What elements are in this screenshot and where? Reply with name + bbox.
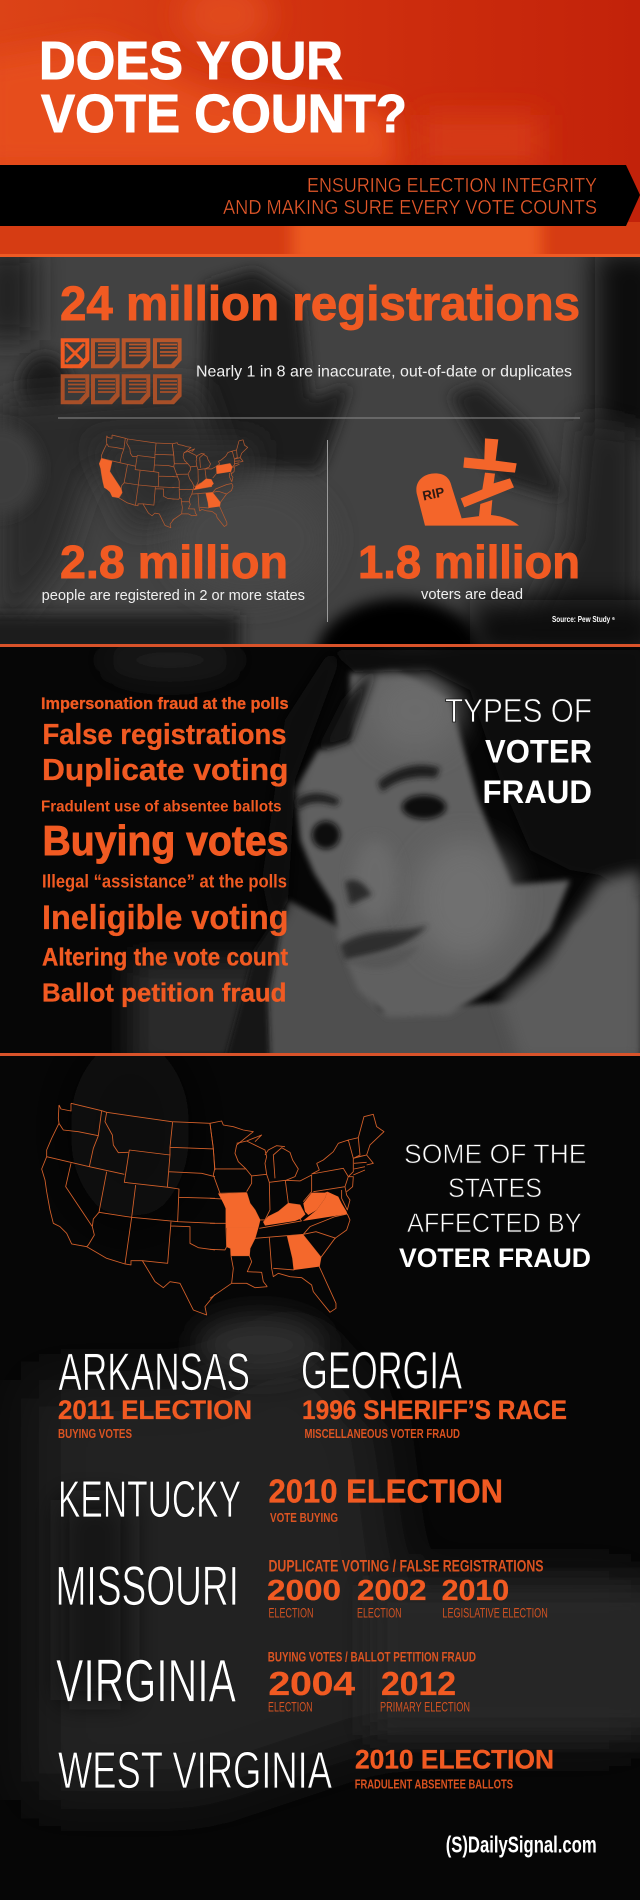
state: West Virginia: FRADULENT ABSENTEE BALLOTS (355, 1778, 513, 1792)
map: affected states (42, 1103, 384, 1315)
heading: some of the states: STATES (448, 1173, 542, 1203)
text: nearly 1 in 8: Nearly 1 in 8 are inaccurate, out-of-date or duplicates (196, 364, 572, 380)
list: types of fraud: False registrations (42, 719, 286, 751)
heading: types of voter fraud (445, 692, 592, 810)
list: types of fraud: Impersonation fraud at the polls (41, 694, 288, 713)
state: Virginia: ELECTION (268, 1698, 313, 1714)
state: Kentucky (58, 1471, 503, 1529)
list: types of fraud: Duplicate voting (42, 752, 288, 787)
state: Georgia (301, 1342, 567, 1441)
icon: ballot documents grid (61, 338, 182, 404)
state: Arkansas (58, 1343, 252, 1441)
list: types of fraud: Illegal “assistance” at the polls (42, 872, 287, 892)
state: Missouri: MISSOURI (56, 1554, 239, 1617)
state: West Virginia: WEST VIRGINIA (58, 1742, 332, 1800)
photo: young woman's face (94, 647, 640, 1053)
stat: 2.8 million: 2.8 million (60, 536, 288, 588)
state: Missouri: 2002 (357, 1575, 426, 1607)
list: types of fraud: Fradulent use of absentee ballots (41, 799, 282, 816)
panel: registration statistics (0, 257, 640, 644)
state: West Virginia: 2010 ELECTION (355, 1745, 554, 1775)
state: Arkansas: 2011 ELECTION (58, 1395, 252, 1425)
list: types of fraud (41, 694, 289, 1008)
heading: 24 million registrations: 24 million registrations (60, 278, 580, 331)
state: Kentucky: KENTUCKY (58, 1471, 241, 1529)
heading: types of voter fraud: VOTER (485, 734, 592, 770)
state: Virginia (56, 1647, 476, 1714)
state: Kentucky: VOTE BUYING (270, 1511, 338, 1525)
map: states with duplicate registrations (99, 435, 248, 528)
list: types of fraud: Buying votes (42, 817, 288, 864)
background: dark blurred photo (0, 1040, 640, 1900)
heading: some of the states: VOTER FRAUD (399, 1243, 591, 1273)
stat: 2.8 million: people are registered in 2 or more states (42, 587, 305, 604)
state: Missouri: DUPLICATE VOTING / FALSE REGISTRATIONS (268, 1556, 544, 1575)
heading: types of voter fraud: TYPES OF (445, 692, 592, 729)
subtitle banner arrow (0, 165, 640, 226)
state: Missouri: LEGISLATIVE ELECTION (442, 1604, 548, 1620)
subtitle banner arrow: ENSURING ELECTION INTEGRITY (307, 175, 597, 197)
stat: 1.8 million: voters are dead (421, 586, 523, 603)
state: Missouri: 2000 (267, 1575, 341, 1607)
state: Virginia: BUYING VOTES / BALLOT PETITION FRAUD (268, 1648, 476, 1664)
stat: 1.8 million: 1.8 million (358, 536, 580, 588)
icon: tombstone and broken cross (416, 438, 519, 526)
state: Arkansas: ARKANSAS (58, 1343, 250, 1402)
heading: types of voter fraud: FRAUD (482, 774, 592, 810)
state: Virginia: 2012 (381, 1665, 456, 1702)
state: Virginia: PRIMARY ELECTION (380, 1698, 470, 1714)
background: orange header panel (0, 0, 640, 265)
state: Missouri: ELECTION (357, 1604, 402, 1620)
source note: Source: Pew Study ⁶ (552, 615, 615, 624)
state: Missouri: 2010 (442, 1575, 509, 1607)
list: types of fraud: Ineligible voting (42, 899, 288, 937)
state: Kentucky: 2010 ELECTION (268, 1472, 503, 1510)
heading: some of the states (399, 1139, 591, 1273)
subtitle banner arrow: AND MAKING SURE EVERY VOTE COUNTS (223, 197, 597, 219)
state: Virginia: 2004 (268, 1665, 356, 1702)
state: Georgia: 1996 SHERIFF’S RACE (302, 1395, 567, 1425)
title: DOES YOUR (39, 31, 343, 91)
state: Arkansas: BUYING VOTES (58, 1427, 132, 1441)
icon: tombstone and broken cross: RIP (421, 484, 446, 504)
panel: states affected (0, 1040, 640, 1900)
state: Georgia: MISCELLANEOUS VOTER FRAUD (304, 1427, 460, 1441)
state: Missouri (56, 1554, 548, 1620)
list: types of fraud: Ballot petition fraud (42, 978, 286, 1008)
title: VOTE COUNT? (41, 84, 407, 144)
state: Virginia: VIRGINIA (56, 1647, 236, 1714)
panel: types of voter fraud (42, 647, 640, 1053)
list: types of fraud: Altering the vote count (42, 944, 289, 972)
state: Georgia: GEORGIA (301, 1342, 462, 1401)
heading: some of the states: AFFECTED BY (407, 1208, 582, 1238)
heading: some of the states: SOME OF THE (404, 1139, 586, 1169)
stat: 2.8 million (42, 536, 305, 604)
background: blurred raised hands photo (0, 257, 640, 644)
title (39, 31, 407, 144)
state: Missouri: ELECTION (268, 1604, 314, 1620)
